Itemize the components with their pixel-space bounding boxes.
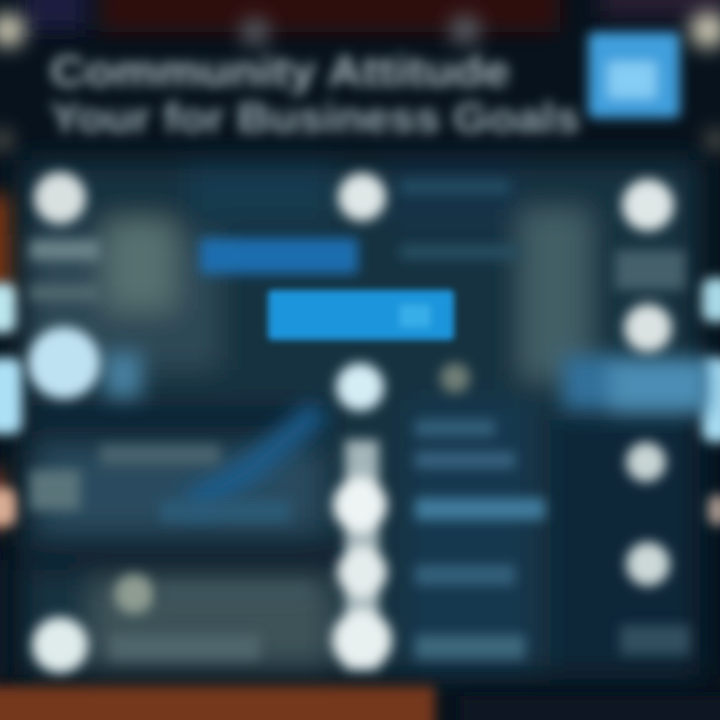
bottom band [0,686,720,720]
center column icons [332,173,470,670]
left column icons [28,172,154,673]
right column icons [615,179,690,655]
icon: top right blue badge [588,32,680,118]
side highlights [0,278,720,526]
text rows: center right column [400,180,545,659]
title block: Community Attitude [50,47,510,96]
right blue callout [562,355,710,413]
title block [50,47,580,141]
heading bar: central cyan label [268,290,454,340]
main panel [20,160,700,675]
title block: Your for Business Goals [50,94,580,141]
left blue callout [104,352,142,398]
text rows: left column [100,445,310,659]
corner lights [0,12,720,150]
heading bar: blue label [200,238,358,274]
diagonal blue chart line [190,410,320,505]
